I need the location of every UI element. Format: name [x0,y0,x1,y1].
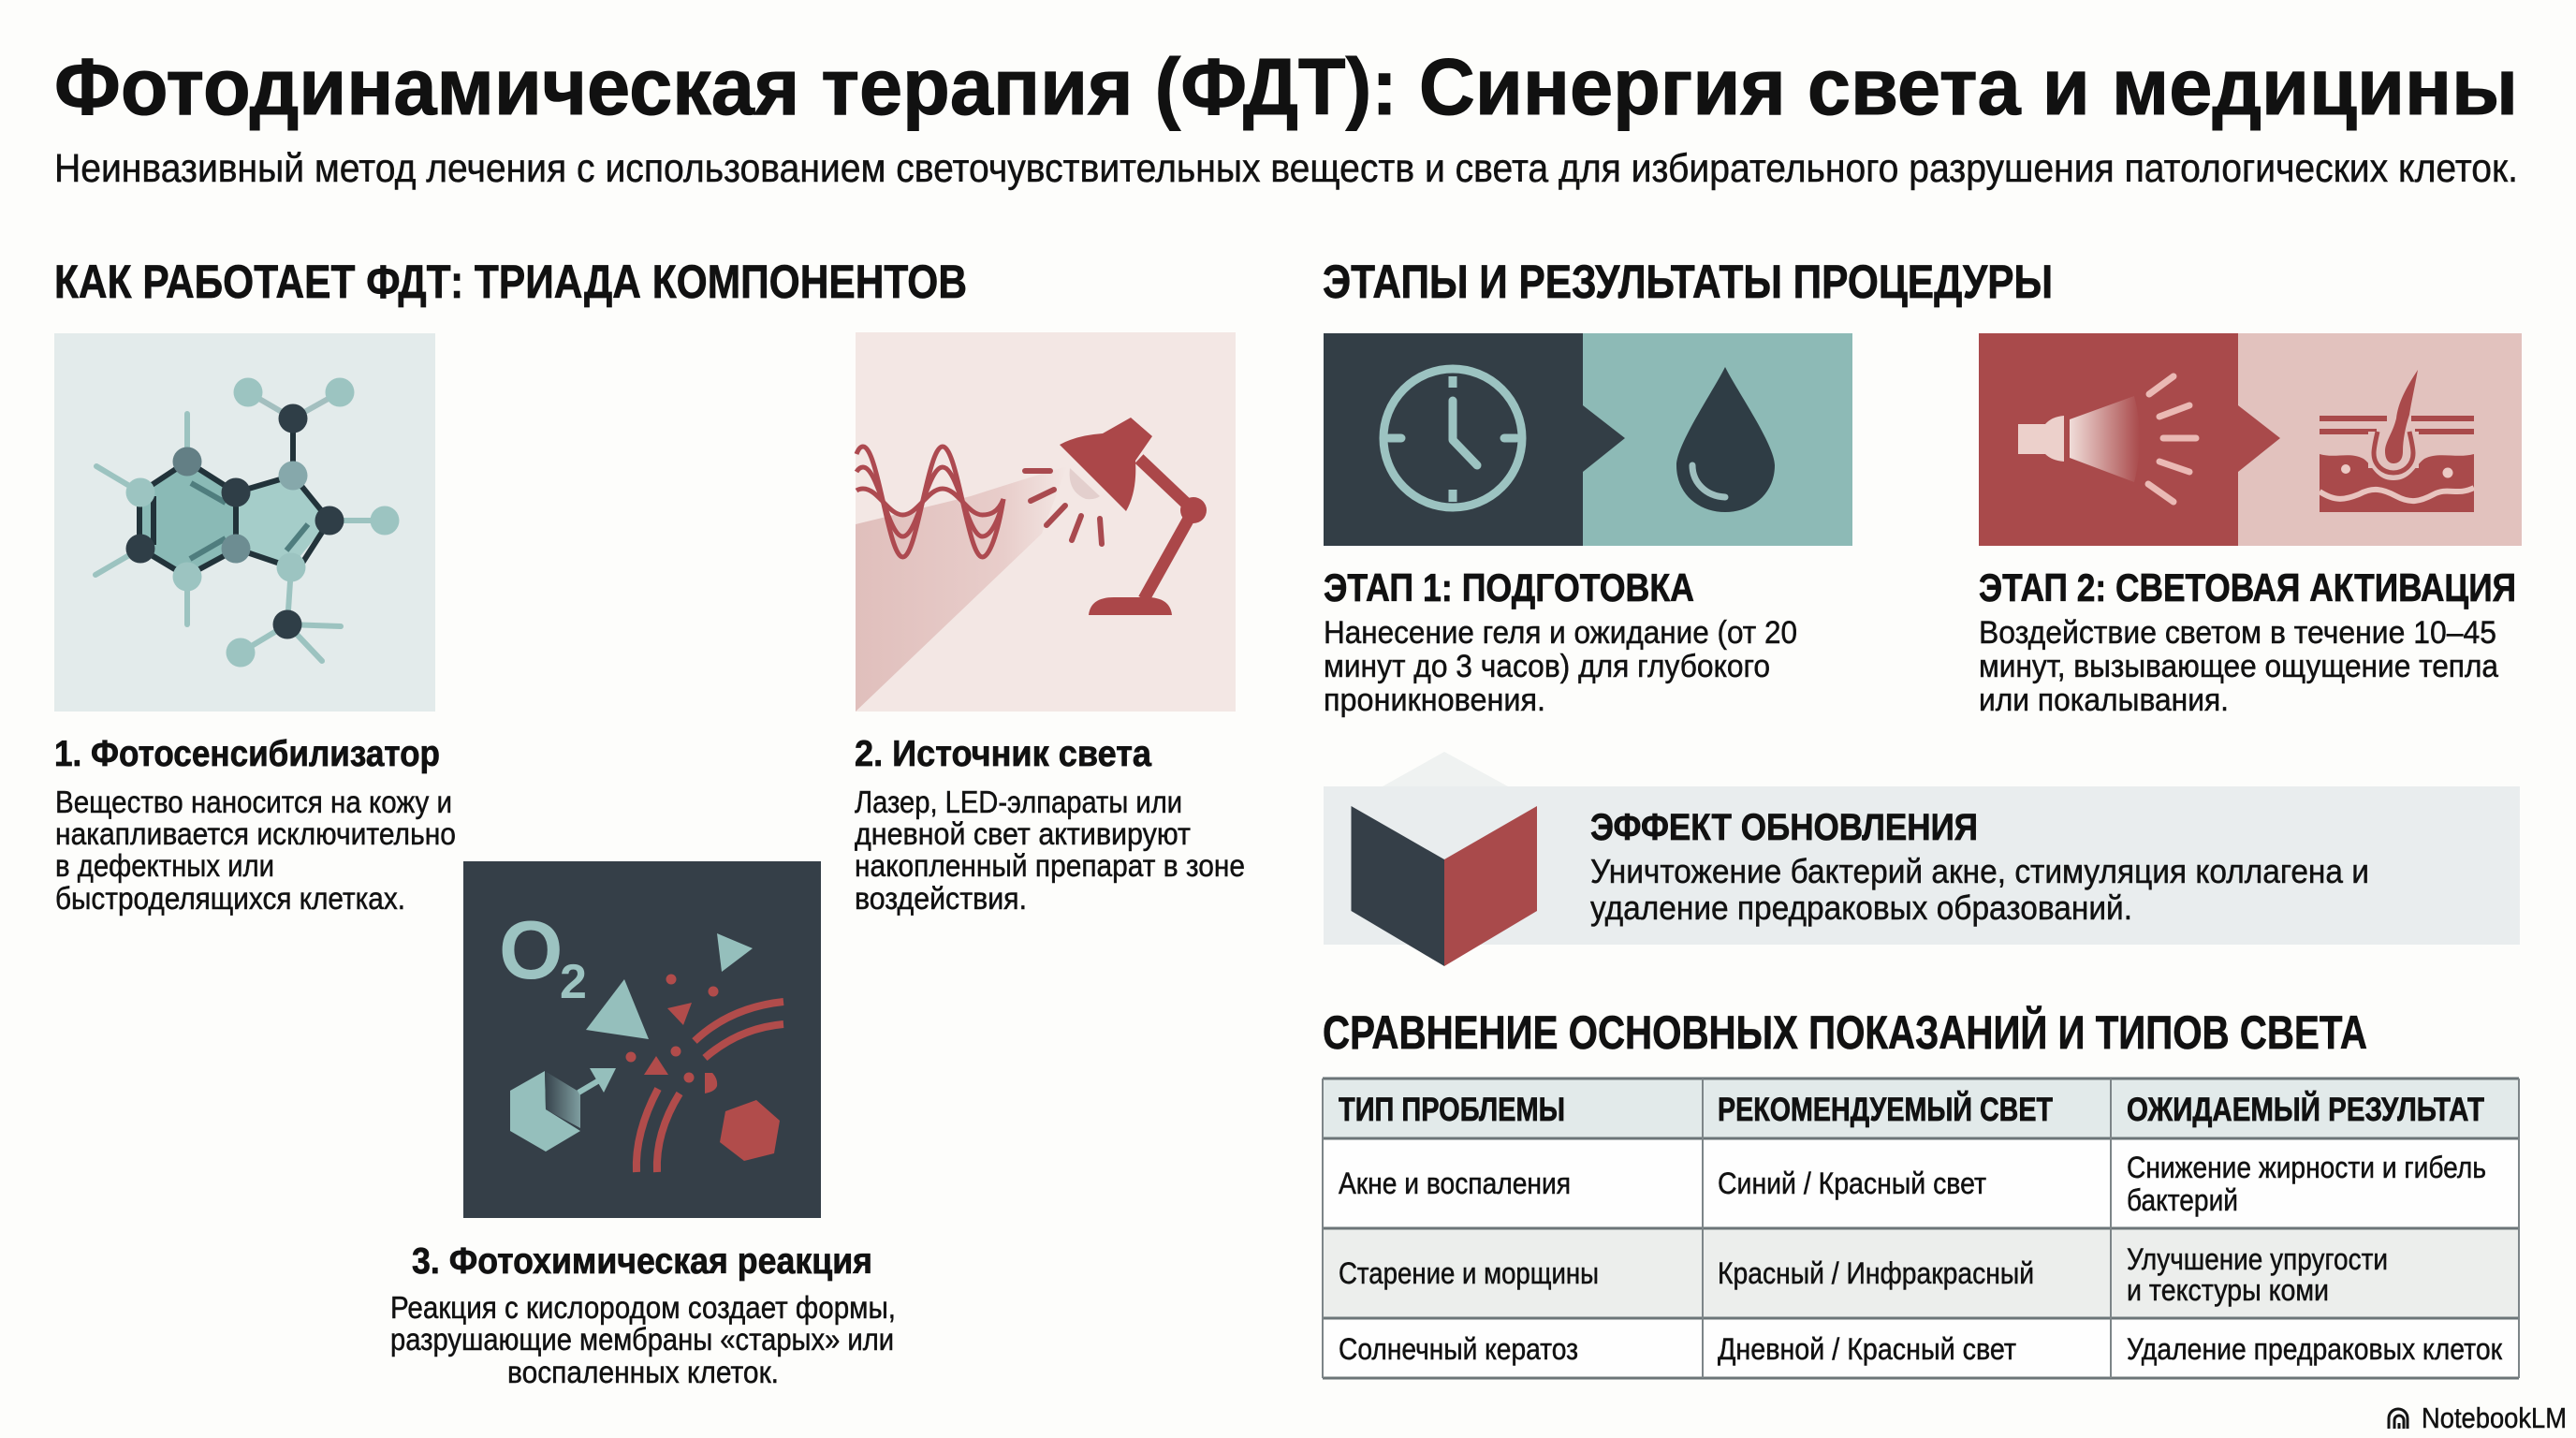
table row: acne: бактерий [2127,1183,2238,1217]
panel: light source lamp [856,332,1236,712]
icon: lamp rays [1025,471,1102,544]
icon: oxygen O2: 2 [560,955,587,1009]
text block: stage 2: Воздействие светом в течение 10–45 [1979,615,2496,651]
text block: photosensitizer: быстроделящихся клетках. [55,881,405,916]
icon: light beam [856,466,1067,712]
table row: aging [1339,1242,2388,1307]
text block: stage 1 [1324,565,1797,718]
text block: stage 2: минут, вызывающее ощущение тепла [1979,649,2498,684]
table row: acne: Акне и воспаления [1339,1167,1571,1200]
text block: light source: дневной свет активируют [855,816,1191,851]
text block: photochemical reaction [390,1241,896,1389]
text block: stage 2: или покалывания. [1979,682,2229,718]
text block: photosensitizer: Вещество наносится на кожу и [55,785,452,819]
table header: ТИП ПРОБЛЕМЫ [1339,1092,1565,1128]
text block: light source: накопленный препарат в зоне [855,848,1245,883]
panel: stage 1 icons [1324,333,1852,546]
text block: photosensitizer: 1. Фотосенсибилизатор [54,734,440,774]
table: indications and light types [1323,1078,2519,1378]
icon: oxygen O2: O [499,903,563,996]
section heading: triad: КАК РАБОТАЕТ ФДТ: ТРИАДА КОМПОНЕНТОВ [54,256,967,308]
title: Фотодинамическая терапия (ФДТ): Синергия света и медицины [54,43,2518,132]
table row: aging: Улучшение упругости [2127,1242,2388,1276]
panel: stage 2 icons [1979,333,2522,546]
callout: renewal effect [1324,752,2520,966]
table row: acne [1339,1151,2486,1217]
text block: stage 2 [1979,565,2516,718]
text block: photochemical reaction: Реакция с кислородом создает формы, [390,1290,896,1325]
icon: flashlight [2018,376,2196,502]
panel: photosensitizer molecule [54,333,435,712]
text block: stage 1: ЭТАП 1: ПОДГОТОВКА [1324,565,1694,609]
icon: gel drop [1676,367,1775,512]
text block: photosensitizer: в дефектных или [55,848,274,883]
text block: photosensitizer: накапливается исключительно [55,816,456,851]
icon: reactive fragments [625,974,783,1172]
text block: photosensitizer [54,734,456,916]
table row: aging: Старение и морщины [1339,1256,1599,1290]
icon: desk lamp [1060,418,1207,615]
table row: keratosis: Дневной / Красный свет [1718,1332,2016,1366]
table row: acne: Синий / Красный свет [1718,1167,1986,1200]
icon: light waves [856,447,1003,557]
text block: photochemical reaction: 3. Фотохимическая реакция [412,1241,872,1282]
table row: aging: и текстуры коми [2127,1273,2329,1307]
callout: renewal effect: Уничтожение бактерий акне, стимуляция коллагена и [1590,852,2369,890]
icon: clock [1383,369,1522,507]
text block: stage 1: минут до 3 часов) для глубокого [1324,649,1770,684]
icon: cell hexagon with arrow [510,1068,616,1152]
icon: skin cross-section [2320,370,2474,512]
text block: stage 1: Нанесение геля и ожидание (от 20 [1324,615,1797,651]
icon: oxygen O2 [499,903,587,1009]
table row: acne: Снижение жирности и гибель [2127,1151,2486,1184]
table header: ОЖИДАЕМЫЙ РЕЗУЛЬТАТ [2127,1091,2484,1128]
section heading: stages: ЭТАПЫ И РЕЗУЛЬТАТЫ ПРОЦЕДУРЫ [1323,256,2053,308]
text block: photochemical reaction: разрушающие мембраны «старых» или [390,1322,894,1357]
panel: photochemical reaction [463,861,821,1218]
text block: light source: Лазер, LED-элпараты или [855,785,1182,819]
icon: cube [1352,806,1537,966]
text block: light source: воздействия. [855,881,1027,916]
table row: aging: Красный / Инфракрасный [1718,1256,2034,1290]
text block: photochemical reaction: воспаленных клеток. [507,1355,779,1389]
table row: keratosis: Удаление предраковых клеток [2127,1332,2503,1366]
text block: light source [855,734,1245,916]
text block: stage 1: проникновения. [1324,682,1545,718]
callout: renewal effect: удаление предраковых образований. [1590,888,2132,927]
table header [1339,1091,2484,1128]
table row: keratosis: Солнечный кератоз [1339,1332,1578,1366]
text block: light source: 2. Источник света [855,734,1151,774]
callout: renewal effect: ЭФФЕКТ ОБНОВЛЕНИЯ [1590,807,1978,848]
table row: keratosis [1339,1332,2503,1366]
table header: РЕКОМЕНДУЕМЫЙ СВЕТ [1718,1091,2053,1128]
